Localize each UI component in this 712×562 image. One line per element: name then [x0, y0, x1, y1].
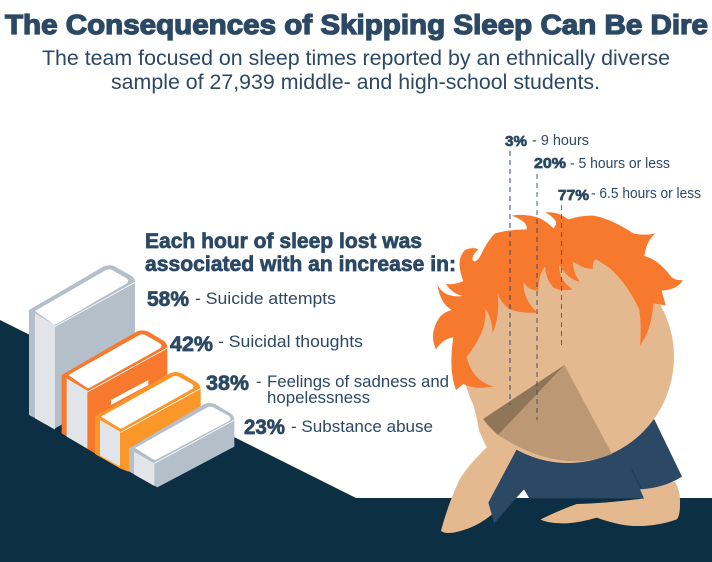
- dark ground shape: [0, 320, 712, 562]
- dashed line: 77% leader: [560, 205, 562, 348]
- illustration: sleepy figure with pie chart head: [433, 212, 683, 533]
- shorts crease: [632, 470, 641, 489]
- dashed line: 20% leader: [536, 174, 538, 420]
- subtitle: sample of 27,939 middle- and high-school students.: [111, 71, 600, 94]
- legs: [541, 482, 680, 526]
- left arm: [441, 383, 527, 533]
- stat: 42% suicidal thoughts: [170, 333, 363, 356]
- stat: 38% feelings of sadness and hopelessness: hopelessness: [267, 389, 370, 407]
- label: 77% 6.5 hours or less: 77%: [558, 187, 589, 204]
- stat: 23% substance abuse: - Substance abuse: [291, 418, 433, 436]
- stat: 58% suicide attempts: 58%: [147, 288, 189, 311]
- label: 77% 6.5 hours or less: [558, 186, 701, 204]
- subtitle: The team focused on sleep times reported by an ethnically diverse: [42, 47, 670, 70]
- hair: [433, 212, 683, 390]
- label: 77% 6.5 hours or less: - 6.5 hours or less: [591, 186, 701, 202]
- stat: 38% feelings of sadness and hopelessness: -: [256, 373, 262, 391]
- stat: 58% suicide attempts: - Suicide attempts: [195, 290, 336, 308]
- shorts: [488, 419, 682, 523]
- label: 3% 9 hours: - 9 hours: [532, 133, 589, 149]
- illustration: stack of books: [29, 265, 234, 487]
- label: 20% 5 hours or less: [534, 155, 670, 172]
- figure body: [441, 383, 682, 533]
- label: 20% 5 hours or less: 20%: [534, 155, 566, 172]
- stat: 23% substance abuse: [244, 416, 433, 439]
- book 3: amber: [95, 372, 201, 472]
- subtitle: [42, 47, 670, 94]
- stat: 23% substance abuse: 23%: [244, 416, 285, 439]
- stat: 38% feelings of sadness and hopelessness: [206, 372, 449, 407]
- stat: 42% suicidal thoughts: - Suicidal thoughts: [218, 333, 363, 351]
- book 4: light grey: [129, 403, 234, 487]
- heading: each hour of sleep lost: [145, 230, 456, 276]
- book 2: orange: [62, 330, 167, 453]
- pie slice: 20%: [483, 365, 564, 435]
- pie slice: 77%: [498, 365, 612, 461]
- heading: each hour of sleep lost: Each hour of sleep lost was: [145, 230, 422, 253]
- title: The Consequences of Skipping Sleep Can Be Dire: [5, 9, 708, 40]
- stat: 58% suicide attempts: [147, 288, 336, 311]
- stat: 38% feelings of sadness and hopelessness: Feelings of sadness and: [267, 373, 449, 391]
- stat: 38% feelings of sadness and hopelessness: 38%: [206, 372, 249, 395]
- stat: 42% suicidal thoughts: 42%: [170, 333, 213, 356]
- dashed line: 3% leader: [509, 151, 511, 405]
- label: 3% 9 hours: 3%: [505, 133, 527, 150]
- label: 20% 5 hours or less: - 5 hours or less: [570, 156, 670, 172]
- book 1: grey: [29, 265, 135, 430]
- head circle: [462, 251, 674, 463]
- label: 3% 9 hours: [505, 133, 589, 150]
- heading: each hour of sleep lost: associated with an increase in:: [145, 253, 456, 276]
